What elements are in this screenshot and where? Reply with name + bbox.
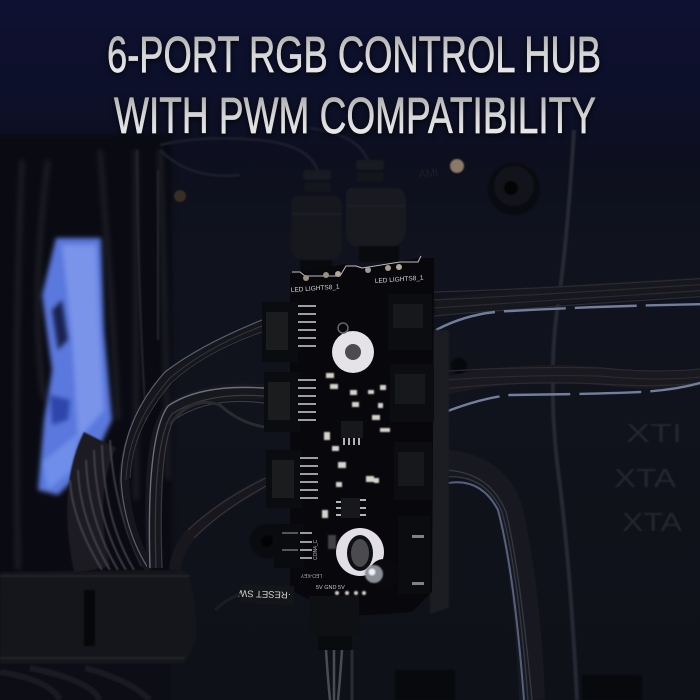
embossed XTA labels xyxy=(614,418,683,537)
RGB connector left xyxy=(291,170,342,272)
chassis plate xyxy=(170,130,700,700)
PCB label LED LIGHTS right: LED LIGHTS8_1 xyxy=(375,275,424,285)
3-pin header lower right xyxy=(398,516,430,594)
capacitor xyxy=(365,559,399,589)
chassis hole xyxy=(451,358,467,374)
embossed XTA labels: XTA xyxy=(622,507,683,537)
lower-left cables xyxy=(0,668,150,700)
fan cable bundle 3 xyxy=(175,478,266,570)
SMD components xyxy=(322,373,390,595)
chassis hole left xyxy=(250,524,284,558)
fan cable bundle 1 xyxy=(121,320,262,570)
chassis label AMI: AMI xyxy=(418,167,439,181)
PCB board xyxy=(290,256,434,616)
top RGB cables xyxy=(160,128,368,176)
fan header left 3 xyxy=(266,450,318,508)
ribbon cable under fan xyxy=(70,440,142,570)
lower white mounting ring xyxy=(336,528,384,576)
left cable bundle xyxy=(0,135,172,580)
cable strap xyxy=(0,570,196,664)
PCB label LED-KEY: LED-KEY xyxy=(300,572,322,578)
reset switch cable tag: ·RESET SW xyxy=(238,587,291,600)
bottom power connector xyxy=(309,596,359,700)
fan cable bundle 2 xyxy=(149,387,270,568)
header LED-KEY lower left xyxy=(274,524,312,568)
screw standoff xyxy=(488,163,540,215)
blue fan glow window xyxy=(38,238,112,495)
reset switch cable tag xyxy=(215,584,294,610)
embossed XTA labels: XTA xyxy=(614,463,677,493)
right fan cables xyxy=(434,278,700,700)
PCB label LED LIGHTS left: LED LIGHTS8_1 xyxy=(291,284,340,294)
main chip U3 xyxy=(341,421,363,445)
fan header right 3 xyxy=(394,442,432,500)
RGB connector right xyxy=(346,160,406,262)
mounting bracket xyxy=(430,330,449,614)
small screw xyxy=(450,159,464,173)
title xyxy=(107,26,601,144)
fan header left 1 xyxy=(262,302,316,362)
second chip xyxy=(336,498,366,518)
upper white mounting ring xyxy=(332,323,374,373)
bottom chassis slots xyxy=(395,670,642,700)
vertical routing cable right xyxy=(553,130,577,700)
fan header right 1 xyxy=(388,294,432,350)
fan header right 2 xyxy=(390,364,434,422)
small screw left xyxy=(174,190,186,202)
embossed XTA labels: XTI xyxy=(626,418,682,448)
fan header left 2 xyxy=(264,372,316,432)
PCB label power pins: 5V GND 5V xyxy=(316,585,345,591)
PCB label CON4: CON4_C xyxy=(313,539,319,560)
